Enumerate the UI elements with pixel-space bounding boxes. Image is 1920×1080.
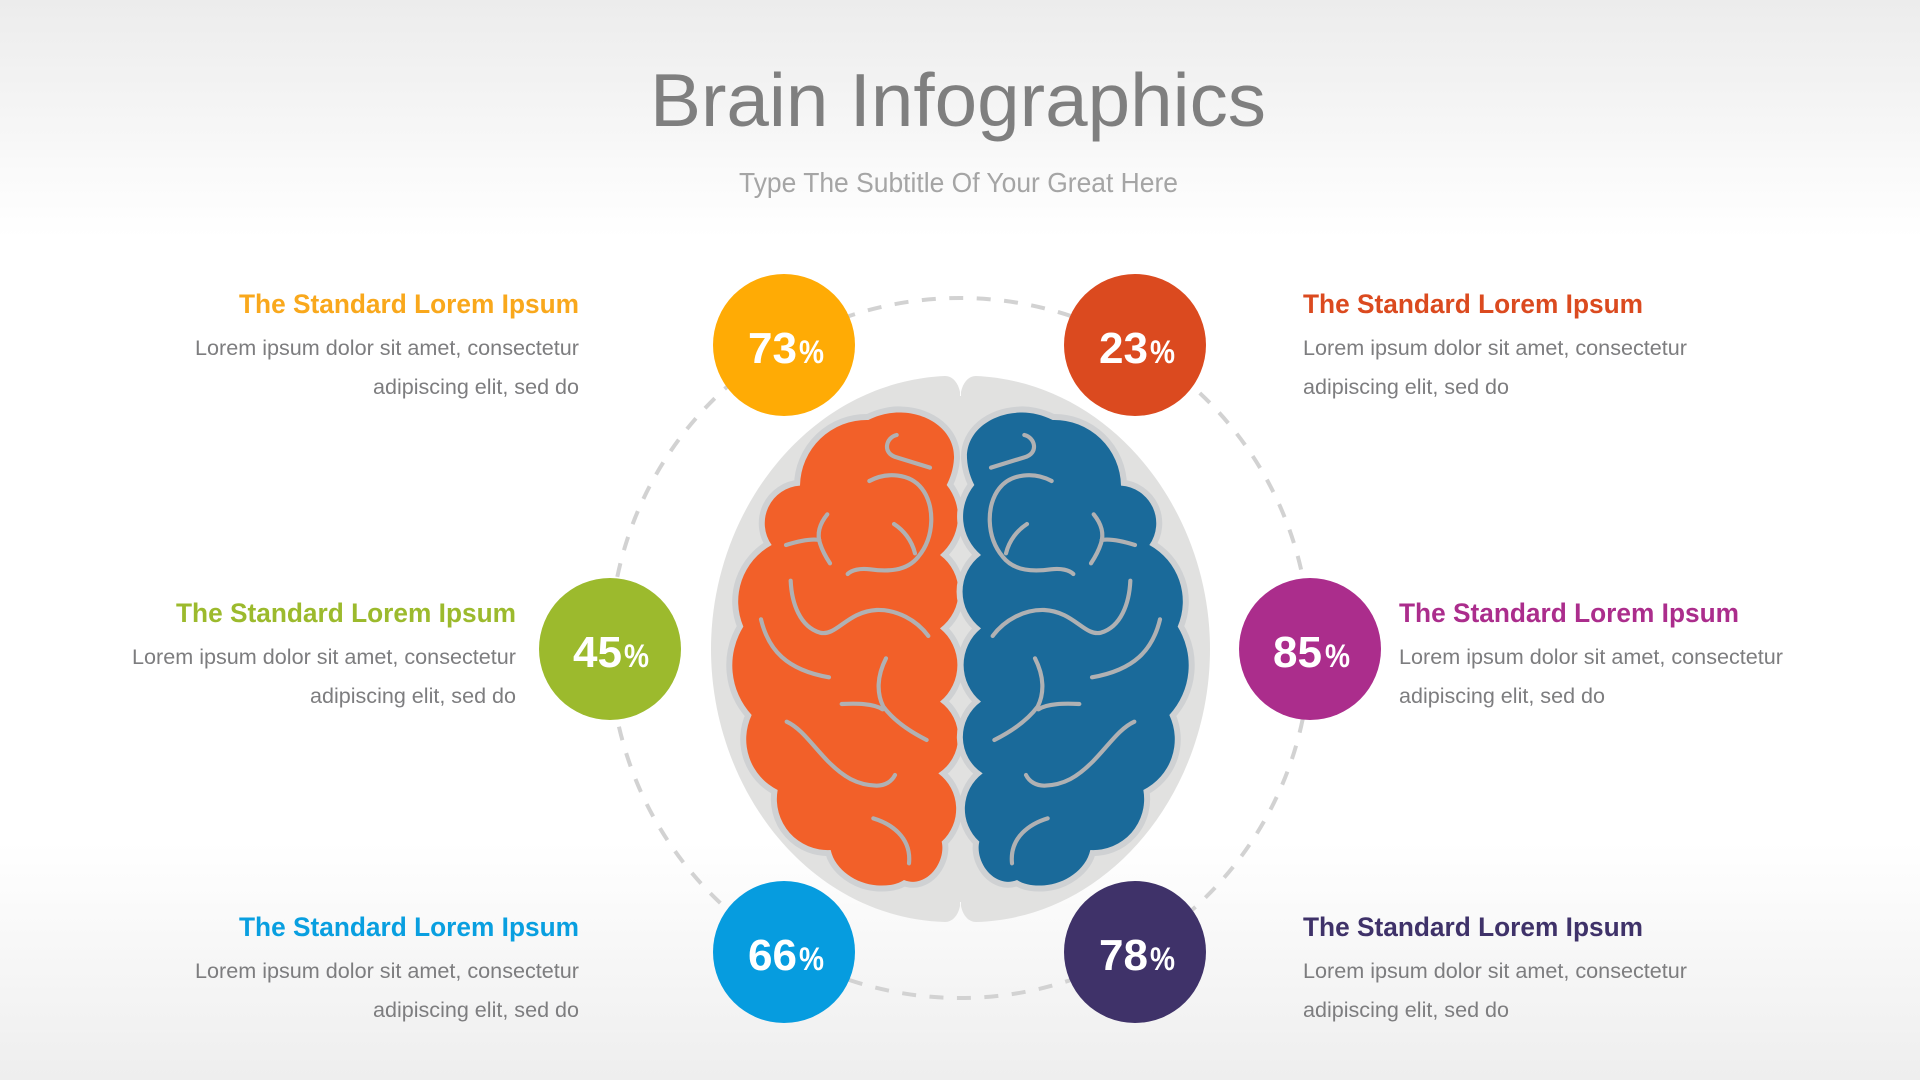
text block: top right: The Standard Lorem Ipsum xyxy=(1303,289,1643,319)
circle: 85%: % xyxy=(1325,638,1350,674)
circle: 73%: % xyxy=(799,334,824,370)
circle: 73%: 73 xyxy=(748,324,797,373)
head silhouette xyxy=(711,376,1210,922)
circle: 85%: 85 xyxy=(1273,628,1322,677)
text block: top right xyxy=(1303,289,1687,399)
text block: top left: Lorem ipsum dolor sit amet, consectetur xyxy=(195,337,579,360)
title: Brain Infographics xyxy=(650,58,1266,142)
circle: 73% xyxy=(713,274,855,416)
text block: bottom right: Lorem ipsum dolor sit amet, consectetur xyxy=(1303,960,1687,983)
text block: middle right xyxy=(1399,598,1783,708)
brain illustration xyxy=(711,376,1210,922)
text block: middle right: The Standard Lorem Ipsum xyxy=(1399,598,1739,628)
left hemisphere xyxy=(732,412,958,886)
text block: middle left: Lorem ipsum dolor sit amet, consectetur xyxy=(132,646,516,669)
circle: 78% xyxy=(1064,881,1206,1023)
text block: bottom right: The Standard Lorem Ipsum xyxy=(1303,912,1643,942)
circle: 66%: 66 xyxy=(748,931,797,980)
circle: 45%: % xyxy=(624,638,649,674)
text block: top right: Lorem ipsum dolor sit amet, consectetur xyxy=(1303,337,1687,360)
circle: 66%: % xyxy=(799,941,824,977)
text block: bottom right: adipiscing elit, sed do xyxy=(1303,999,1509,1022)
text block: bottom right xyxy=(1303,912,1687,1022)
circle: 78%: % xyxy=(1150,941,1175,977)
circle: 23%: 23 xyxy=(1099,324,1148,373)
circle: 23% xyxy=(1064,274,1206,416)
text block: top left: adipiscing elit, sed do xyxy=(373,376,579,399)
dashed ring connecting the percentage circles xyxy=(610,298,1310,998)
text block: bottom left: The Standard Lorem Ipsum xyxy=(239,912,579,942)
text block: top left xyxy=(195,289,579,399)
circle: 45% xyxy=(539,578,681,720)
text block: bottom left xyxy=(195,912,579,1022)
text block: middle left: The Standard Lorem Ipsum xyxy=(176,598,516,628)
text block: top left: The Standard Lorem Ipsum xyxy=(239,289,579,319)
circle: 23%: % xyxy=(1150,334,1175,370)
text block: middle right: adipiscing elit, sed do xyxy=(1399,685,1605,708)
right hemisphere xyxy=(963,412,1189,886)
text block: middle left: adipiscing elit, sed do xyxy=(310,685,516,708)
circle: 45%: 45 xyxy=(573,628,622,677)
text block: top right: adipiscing elit, sed do xyxy=(1303,376,1509,399)
circle: 85% xyxy=(1239,578,1381,720)
text block: middle left xyxy=(132,598,516,708)
text block: bottom left: adipiscing elit, sed do xyxy=(373,999,579,1022)
circle: 78%: 78 xyxy=(1099,931,1148,980)
text block: bottom left: Lorem ipsum dolor sit amet, consectetur xyxy=(195,960,579,983)
circle: 66% xyxy=(713,881,855,1023)
subtitle: Type The Subtitle Of Your Great Here xyxy=(739,167,1178,198)
text block: middle right: Lorem ipsum dolor sit amet, consectetur xyxy=(1399,646,1783,669)
